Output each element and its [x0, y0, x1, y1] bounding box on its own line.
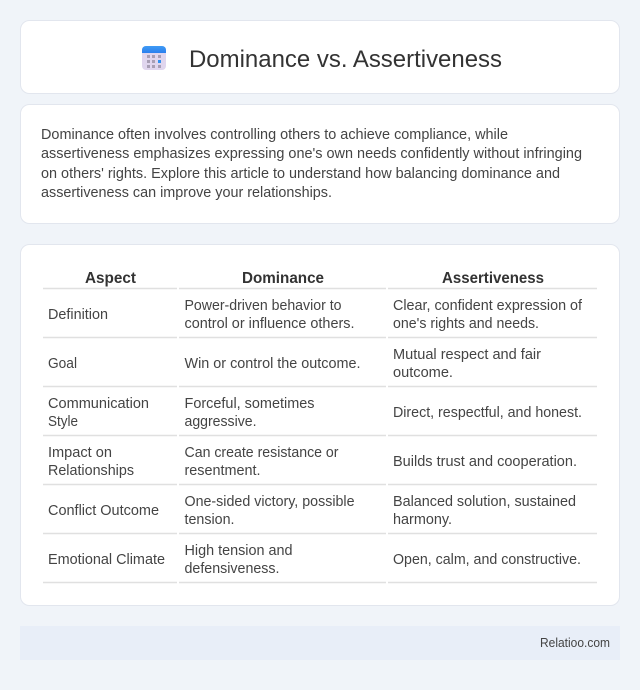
table header: [85, 270, 544, 287]
table header: Aspect: [85, 270, 136, 287]
row: definition: one's rights and needs.: [393, 316, 539, 332]
row: conflict outcome: harmony.: [393, 512, 452, 528]
intro text: [41, 127, 582, 201]
row: goal: outcome.: [393, 365, 453, 381]
row: impact on relationships: [48, 445, 577, 479]
row: impact on relationships: Can create resistance or: [184, 445, 339, 461]
row: conflict outcome: tension.: [184, 512, 234, 528]
intro text: on others' rights. Explore this article to understand how balancing dominance and: [41, 166, 560, 182]
row: communication style: [48, 396, 582, 430]
intro card: [20, 104, 620, 224]
table header: Assertiveness: [442, 270, 544, 287]
row: definition: control or influence others.: [184, 316, 354, 332]
row: communication style: Style: [48, 414, 78, 430]
row: impact on relationships: Relationships: [48, 463, 134, 479]
footer brand: Relatioo.com: [540, 635, 610, 650]
row: definition: Power-driven behavior to: [184, 298, 342, 314]
icon: calendar: [142, 46, 166, 70]
row: goal: Win or control the outcome.: [184, 356, 360, 372]
header card: [20, 20, 620, 94]
row: definition: Clear, confident expression of: [393, 298, 583, 314]
row: goal: Goal: [48, 356, 77, 372]
title: Dominance vs. Assertiveness: [189, 46, 502, 73]
row: communication style: aggressive.: [184, 414, 256, 430]
row: emotional climate: High tension and: [184, 543, 292, 559]
row: conflict outcome: Conflict Outcome: [48, 503, 159, 519]
row: communication style: Communication: [48, 396, 149, 412]
footer: [20, 626, 620, 660]
row: emotional climate: defensiveness.: [184, 561, 280, 577]
intro text: assertiveness emphasizes expressing one's own needs confidently without infringing: [41, 146, 582, 162]
row: communication style: Direct, respectful, and honest.: [393, 405, 582, 421]
row: goal: Mutual respect and fair: [393, 347, 541, 363]
row: definition: Definition: [48, 307, 108, 323]
row: emotional climate: Open, calm, and constructive.: [393, 552, 581, 568]
row: conflict outcome: Balanced solution, sustained: [393, 494, 576, 510]
table card: [20, 244, 620, 606]
intro text: Dominance often involves controlling others to achieve compliance, while: [41, 127, 508, 143]
row: impact on relationships: resentment.: [184, 463, 260, 479]
row: goal: [48, 347, 541, 381]
row: conflict outcome: One-sided victory, possible: [184, 494, 354, 510]
intro text: assertiveness can improve your relationships.: [41, 185, 332, 201]
row: communication style: Forceful, sometimes: [184, 396, 314, 412]
row: emotional climate: Emotional Climate: [48, 552, 165, 568]
row: emotional climate: [48, 543, 581, 577]
row: definition: [48, 298, 583, 332]
table header: Dominance: [242, 270, 324, 287]
row: conflict outcome: [48, 494, 576, 528]
row: impact on relationships: Impact on: [48, 445, 112, 461]
row: impact on relationships: Builds trust and cooperation.: [393, 454, 577, 470]
